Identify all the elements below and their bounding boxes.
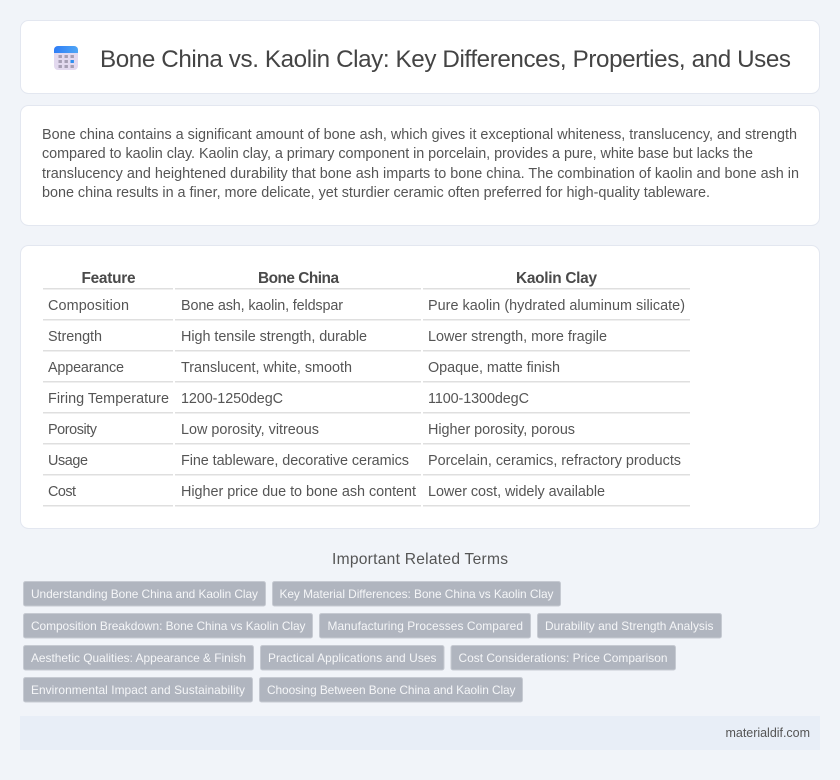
row: strength: [48, 329, 607, 345]
row: usage: Porcelain, ceramics, refractory products: [428, 453, 681, 469]
row: firing temperature: 1200-1250degC: [181, 391, 283, 407]
row: strength: Lower strength, more fragile: [428, 329, 607, 345]
related terms chips: Aesthetic Qualities: Appearance & Finish: [31, 651, 246, 665]
row: cost: Cost: [48, 484, 76, 500]
table header: Bone China: [258, 270, 339, 287]
row: strength: High tensile strength, durable: [181, 329, 367, 345]
row: cost: Higher price due to bone ash content: [181, 484, 416, 500]
row: porosity: Low porosity, vitreous: [181, 422, 319, 438]
row: appearance: [48, 360, 560, 376]
row: appearance: Translucent, white, smooth: [181, 360, 352, 376]
row: composition: [48, 298, 685, 314]
heading: related terms: Important Related Terms: [332, 551, 508, 568]
related terms chips: Durability and Strength Analysis: [545, 619, 714, 633]
row: appearance: Appearance: [48, 360, 124, 376]
related terms chips: Cost Considerations: Price Comparison: [458, 651, 668, 665]
related terms chips: [24, 582, 722, 702]
related terms chips: Choosing Between Bone China and Kaolin Clay: [267, 683, 516, 697]
panel: header: [20, 20, 820, 94]
row: porosity: [48, 422, 575, 438]
row: composition: Composition: [48, 298, 129, 314]
row: appearance: Opaque, matte finish: [428, 360, 560, 376]
footer source: materialdif.com: [726, 726, 810, 740]
related terms chips: Environmental Impact and Sustainability: [31, 683, 245, 697]
footer: [20, 716, 820, 750]
related terms chips: Manufacturing Processes Compared: [328, 619, 523, 633]
panel: comparison table: [20, 246, 820, 528]
row: usage: Fine tableware, decorative ceramics: [181, 453, 409, 469]
row: firing temperature: Firing Temperature: [48, 391, 169, 407]
related terms chips: Practical Applications and Uses: [268, 651, 437, 665]
panel: introduction: [20, 106, 820, 226]
row: porosity: Porosity: [48, 422, 98, 438]
row: firing temperature: [48, 391, 529, 407]
row: cost: [48, 484, 605, 500]
text block: introduction: [42, 127, 799, 201]
row: usage: Usage: [48, 453, 88, 469]
related terms chips: Key Material Differences: Bone China vs Kaolin Clay: [280, 587, 554, 601]
table header: Kaolin Clay: [516, 270, 597, 287]
table header: Feature: [82, 270, 136, 287]
text block: introduction: Bone china contains a significant amount of bone ash, which gives it exceptional whiteness, translucency, and strength: [42, 127, 797, 143]
text block: introduction: compared to kaolin clay. Kaolin clay, a primary component in porcelain, provides a pure, white base but lacks the: [42, 146, 753, 162]
text block: introduction: translucency and heightened durability that bone ash imparts to bone china. The combination of kaolin and bone ash in: [42, 166, 799, 182]
row: cost: Lower cost, widely available: [428, 484, 605, 500]
table header: [82, 270, 597, 287]
related terms chips: Understanding Bone China and Kaolin Clay: [31, 587, 258, 601]
row: porosity: Higher porosity, porous: [428, 422, 575, 438]
icon: calendar: [54, 46, 78, 70]
row: usage: [48, 453, 681, 469]
row: composition: Pure kaolin (hydrated aluminum silicate): [428, 298, 685, 314]
row: strength: Strength: [48, 329, 102, 345]
title: Bone China vs. Kaolin Clay: Key Differences, Properties, and Uses: [100, 46, 791, 73]
related terms chips: Composition Breakdown: Bone China vs Kaolin Clay: [31, 619, 306, 633]
row: composition: Bone ash, kaolin, feldspar: [181, 298, 343, 314]
text block: introduction: bone china results in a finer, more delicate, yet sturdier ceramic often preferred for high-quality tableware.: [42, 185, 710, 201]
row: firing temperature: 1100-1300degC: [428, 391, 529, 407]
